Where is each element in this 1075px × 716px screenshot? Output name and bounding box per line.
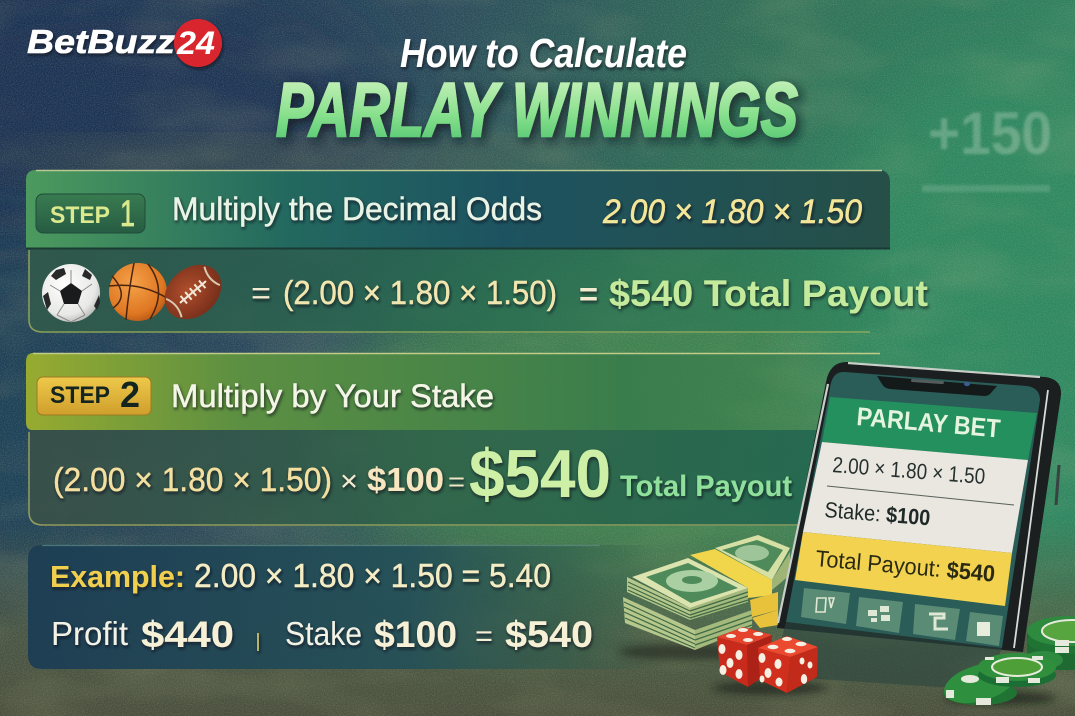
screen header band	[822, 397, 1037, 460]
screen yellow bar	[795, 532, 1012, 606]
stake formula: ×	[340, 465, 358, 498]
step 1 badge	[36, 193, 145, 234]
profit and stake sum: Stake	[285, 615, 362, 652]
step 1 header	[26, 170, 890, 249]
step 2 badge	[37, 374, 151, 415]
payout formula	[251, 273, 928, 314]
payout formula: $540 Total Payout	[609, 273, 928, 314]
step 2 body	[29, 430, 830, 526]
step 1 odds: 2.00 × 1.80 × 1.50	[602, 193, 862, 231]
example calculation: 2.00 × 1.80 × 1.50 = 5.40	[194, 557, 551, 594]
illustration: cash stacks	[618, 535, 790, 660]
notch	[877, 376, 997, 396]
die right	[758, 636, 818, 693]
step 2 heading: Multiply by Your Stake	[171, 378, 494, 414]
profit and stake sum: =	[475, 620, 493, 653]
step 2 badge: STEP	[50, 382, 110, 409]
step 1 badge: 1	[120, 193, 135, 234]
screen heading: PARLAY BET	[855, 401, 1002, 444]
illustration: dice	[712, 627, 828, 695]
profit and stake sum: $540	[505, 614, 593, 655]
icon: american football	[154, 254, 232, 330]
profit and stake sum	[51, 614, 593, 655]
paper bands	[690, 549, 772, 598]
step 2 badge: 2	[120, 374, 140, 415]
sports balls icons	[42, 254, 232, 330]
phone body	[777, 362, 1061, 652]
title line 1: How to Calculate	[400, 30, 687, 76]
lower stack	[623, 597, 695, 650]
step 2 header	[26, 353, 880, 430]
payout formula: =	[579, 276, 598, 312]
rear chip stack	[1023, 616, 1075, 670]
icon: basketball	[109, 263, 167, 321]
screen stake: Stake: $100	[824, 497, 931, 530]
stake formula: =	[448, 466, 465, 497]
icon: soccer ball	[42, 264, 100, 322]
logo: BetBuzz24: 24	[176, 25, 215, 61]
logo: BetBuzz24: BetBuzz	[27, 23, 176, 60]
panel: example	[28, 545, 660, 669]
faded odds number +150	[922, 100, 1052, 192]
stake formula: $540	[469, 436, 611, 512]
panel: step 2	[26, 353, 880, 526]
title	[276, 30, 798, 153]
phone screen	[772, 372, 1040, 690]
example calculation	[50, 557, 551, 594]
die left	[717, 627, 772, 687]
screen white panel	[803, 442, 1028, 553]
top stack	[627, 577, 690, 620]
stake formula: (2.00 × 1.80 × 1.50)	[53, 461, 332, 498]
stake formula	[53, 436, 792, 512]
front left chip	[939, 655, 1021, 711]
stake formula: $100	[367, 461, 444, 498]
payout formula: =	[251, 275, 271, 311]
screen buttons	[801, 588, 1003, 646]
front top chip	[978, 653, 1056, 687]
illustration: phone	[772, 362, 1061, 690]
panel: step 1	[26, 170, 928, 333]
payout formula: (2.00 × 1.80 × 1.50)	[283, 274, 557, 311]
profit and stake sum: Profit	[51, 615, 128, 652]
step 1 body	[29, 248, 928, 333]
logo: BetBuzz24	[27, 19, 222, 67]
profit and stake sum: $440	[141, 614, 234, 655]
screen total payout: Total Payout: $540	[815, 545, 996, 587]
screen odds: 2.00 × 1.80 × 1.50	[832, 452, 986, 489]
step 1 heading: Multiply the Decimal Odds	[172, 191, 542, 227]
step 1 badge: STEP	[50, 202, 110, 229]
back stack	[715, 535, 790, 580]
title line 2: PARLAY WINNINGS	[276, 68, 798, 153]
example calculation: Example:	[50, 559, 185, 594]
illustration: poker chips	[939, 616, 1075, 711]
stake formula: Total Payout	[620, 470, 792, 503]
faded odds number +150: +150	[928, 100, 1052, 167]
profit and stake sum: $100	[374, 614, 457, 655]
